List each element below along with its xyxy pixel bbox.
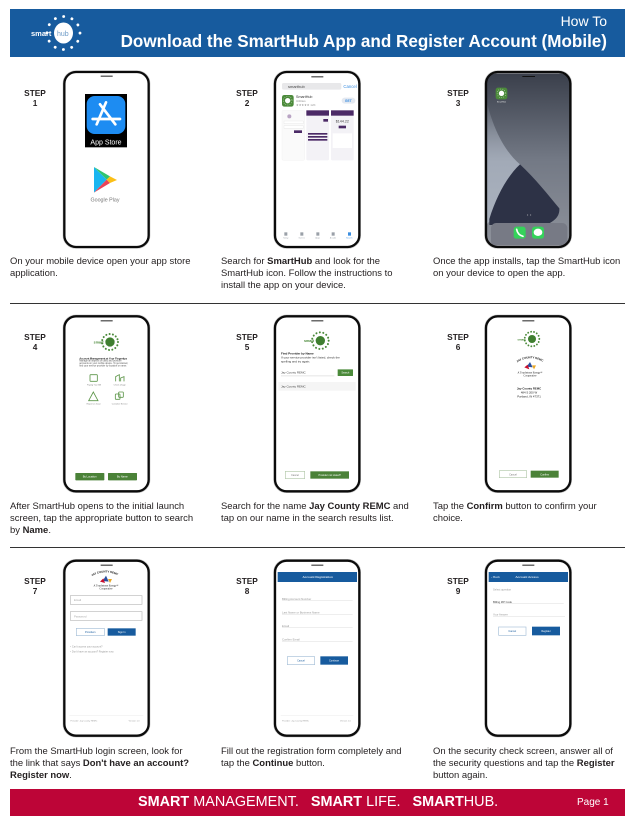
- app screenshots: $144.22: [336, 120, 349, 124]
- phone: confirm provider: [484, 314, 572, 493]
- step 2 text: install the app on your device.: [221, 280, 346, 291]
- step 2 text: Search for SmartHub and look for the: [221, 256, 380, 267]
- search bar: Cancel: [343, 84, 357, 89]
- title: Download the SmartHub App and Register Account (Mobile): [121, 32, 607, 51]
- app listing: ★★★★★ 12K: [296, 103, 316, 107]
- password field: [70, 612, 142, 620]
- logo: [304, 332, 329, 349]
- security fields: Select question: [493, 588, 512, 592]
- button: cancel: [499, 471, 527, 478]
- step 6 label: 6: [456, 342, 460, 352]
- title bar: [278, 572, 357, 582]
- button: cancel: Cancel: [291, 474, 299, 477]
- step 7 label: [24, 576, 46, 596]
- tab bar: Today: [283, 238, 288, 240]
- icon: SmartHub logo: [31, 15, 82, 51]
- password field: Password: [74, 614, 87, 618]
- phone: app stores: [62, 70, 150, 249]
- help links: ▪ Can't access your account?: [70, 645, 103, 648]
- cooperative logo: Cooperative: [100, 588, 113, 591]
- footer band: [10, 789, 625, 816]
- feature icons: [89, 375, 124, 401]
- button: cancel: [287, 657, 315, 665]
- step 1 text: On your mobile device open your app store: [10, 256, 190, 267]
- step 6 text: [433, 501, 597, 524]
- instructions: Find Provider by Name: [281, 352, 314, 356]
- button: by location: By Location: [83, 475, 97, 479]
- step 2 label: STEP: [236, 88, 258, 98]
- button: provider not listed: Provider not Listed?: [319, 474, 341, 477]
- step 4 text: by Name.: [10, 525, 51, 536]
- cooperative logo: [92, 570, 118, 591]
- step 1 text: [10, 256, 190, 279]
- tab bar: Apps: [315, 237, 320, 240]
- form fields: Last Name or Business Name: [282, 611, 320, 615]
- header banner: [10, 9, 625, 57]
- feature captions: [87, 385, 128, 405]
- step 2 label: 2: [245, 98, 249, 108]
- step 6 label: [447, 332, 469, 352]
- button: sign in: Sign In: [118, 631, 126, 634]
- step 2 text: SmartHub icon. Follow the instructions to: [221, 268, 393, 279]
- step 7 label: 7: [33, 586, 37, 596]
- button: confirm: Confirm: [540, 473, 549, 476]
- title bar: Account Access: [515, 575, 539, 579]
- feature captions: Report an Issue: [87, 402, 102, 405]
- step 9 label: STEP: [447, 576, 469, 586]
- cooperative logo: JAY COUNTY REMC: [516, 356, 544, 362]
- tab bar: Search: [346, 238, 353, 240]
- phone: home screen: [484, 70, 572, 249]
- step 8 label: STEP: [236, 576, 258, 586]
- step 8 label: 8: [245, 586, 249, 596]
- button: cancel: Cancel: [297, 660, 305, 663]
- step 6 text: Tap the Confirm button to confirm your: [433, 501, 597, 512]
- security fields: [493, 588, 565, 617]
- help links: [70, 645, 114, 653]
- step 9 label: 9: [456, 586, 460, 596]
- email field: [70, 596, 142, 604]
- button: provider not listed: [310, 471, 349, 479]
- provider footer: Version 1.0: [129, 719, 140, 722]
- wallpaper: [486, 73, 570, 246]
- title bar: [489, 572, 568, 582]
- step 7 text: From the SmartHub login screen, look for: [10, 746, 183, 757]
- step 8 text: Fill out the registration form completely and: [221, 746, 401, 757]
- cooperative logo: A Touchstone Energy®: [94, 584, 118, 587]
- phone: find provider: [273, 314, 361, 493]
- app listing: [282, 95, 355, 107]
- button: cancel: Cancel: [508, 630, 517, 633]
- search field: Jay County REMC: [281, 371, 307, 375]
- provider address: Jay County REMC: [517, 386, 541, 390]
- step 5 label: [236, 332, 258, 352]
- button: by name: [108, 473, 137, 480]
- logo: smart: [517, 337, 526, 341]
- phone: login screen: [62, 559, 150, 738]
- icon: App Store: App Store: [90, 139, 122, 146]
- phone: account registration: [273, 559, 361, 738]
- form fields: [282, 597, 353, 642]
- button: providers: Providers: [85, 631, 96, 634]
- step 3 label: STEP: [447, 88, 469, 98]
- button: cancel: [285, 471, 305, 479]
- intro text: [79, 357, 128, 367]
- form fields: Billing Account Number: [282, 597, 311, 601]
- step 2 text: [221, 256, 393, 291]
- email field: Email: [74, 598, 81, 602]
- search bar: [282, 83, 357, 90]
- feature captions: Customer Service: [112, 402, 128, 405]
- intro text: Manage all aspects of utility and provider: [79, 360, 122, 363]
- step 9 text: [433, 746, 615, 781]
- provider footer: Version 1.0: [340, 720, 352, 723]
- instructions: If your service provider isn't listed, check the: [281, 356, 340, 360]
- app screenshots: [282, 110, 354, 160]
- form fields: Confirm Email: [282, 638, 300, 642]
- title bar: ‹ Back: [491, 575, 500, 579]
- step 5 label: 5: [245, 342, 249, 352]
- instructions: spelling and try again.: [281, 359, 310, 363]
- provider footer: Provider: Jay County REMC: [282, 720, 309, 723]
- step 4 text: [10, 501, 193, 536]
- tab bar: [283, 232, 353, 240]
- step 9 text: button again.: [433, 770, 488, 781]
- button: by name: By Name: [117, 475, 128, 479]
- step 3 label: [447, 88, 469, 108]
- step 6 label: STEP: [447, 332, 469, 342]
- intro text: accounts on your mobile device. To get started,: [79, 362, 128, 365]
- provider footer: [281, 715, 353, 723]
- step 3 text: Once the app installs, tap the SmartHub icon: [433, 256, 620, 267]
- step 4 label: 4: [33, 342, 37, 352]
- step 9 text: On the security check screen, answer all of: [433, 746, 613, 757]
- button: continue: Continue: [329, 660, 340, 663]
- step 5 label: STEP: [236, 332, 258, 342]
- button: register: [532, 627, 560, 635]
- step 5 text: tap on our name in the search results list.: [221, 513, 394, 524]
- provider address: Portland, IN 47371: [517, 394, 541, 398]
- step 7 label: STEP: [24, 576, 46, 586]
- provider footer: Provider: Jay County REMC: [70, 719, 98, 722]
- logo: [94, 334, 118, 350]
- search field: Search: [341, 372, 350, 375]
- step 8 label: [236, 576, 258, 596]
- app listing: SmartHub: [296, 95, 312, 99]
- icon: SmartHub app: [496, 88, 507, 104]
- feature captions: Check Usage: [114, 385, 127, 387]
- button: cancel: [499, 627, 526, 635]
- search result: [278, 382, 356, 391]
- divider: [10, 303, 625, 304]
- provider address: 484 S 200 W: [521, 390, 538, 394]
- logo: smart: [94, 340, 104, 344]
- search bar: smarthub: [288, 84, 305, 89]
- divider: [10, 547, 625, 548]
- feature captions: Paying Your Bill: [87, 385, 102, 387]
- form fields: Email: [282, 624, 289, 628]
- provider footer: [69, 715, 143, 722]
- intro text: Account Management at Your Fingertips: [79, 357, 128, 360]
- step 9 text: the security questions and tap the Register: [433, 758, 615, 769]
- provider address: [517, 386, 541, 398]
- icon: Google Play: Google Play: [90, 197, 120, 203]
- step 7 text: Register now.: [10, 770, 72, 781]
- title bar: Account Registration: [302, 575, 333, 579]
- step 3 label: 3: [456, 98, 460, 108]
- button: continue: [320, 656, 348, 665]
- cooperative logo: A Touchstone Energy®: [518, 371, 542, 374]
- search result: Jay County REMC: [281, 384, 307, 388]
- step 9 label: [447, 576, 469, 596]
- security fields: Your Answer: [493, 613, 508, 617]
- search field: [281, 369, 353, 376]
- cooperative logo: Cooperative: [524, 375, 537, 378]
- instructions: [281, 352, 340, 363]
- step 3 text: [433, 256, 620, 279]
- step 4 label: STEP: [24, 332, 46, 342]
- heading: how to: How To: [561, 13, 607, 29]
- step 4 text: screen, tap the appropriate button to search: [10, 513, 193, 524]
- icon: App Store: [85, 94, 127, 147]
- button: sign in: [108, 628, 136, 636]
- logo: [517, 332, 539, 346]
- step 1 label: STEP: [24, 88, 46, 98]
- step 1 label: [24, 88, 46, 108]
- step 1 label: 1: [33, 98, 37, 108]
- cooperative logo: [516, 356, 544, 378]
- step 7 text: the link that says Don't have an account?: [10, 758, 189, 769]
- step 5 text: Search for the name Jay County REMC and: [221, 501, 409, 512]
- button: cancel: Cancel: [509, 473, 517, 476]
- icon: SmartHub logo: hub: [57, 31, 69, 38]
- security fields: Billing ZIP Code: [493, 600, 513, 604]
- button: confirm: [531, 471, 559, 478]
- step 3 text: on your device to open the app.: [433, 268, 565, 279]
- icon: Google Play: [90, 167, 120, 203]
- step 6 text: choice.: [433, 513, 463, 524]
- step 2 label: [236, 88, 258, 108]
- button: providers: [76, 628, 104, 636]
- phone: security check: [484, 559, 572, 738]
- step 8 text: [221, 746, 401, 769]
- button: register: Register: [541, 630, 551, 633]
- step 4 label: [24, 332, 46, 352]
- logo: smart: [304, 339, 315, 343]
- page number: Page 1: [577, 797, 609, 808]
- step 8 text: tap the Continue button.: [221, 758, 325, 769]
- icon: SmartHub logo: smart: [31, 29, 52, 38]
- step 5 text: [221, 501, 409, 524]
- tagline: SMART MANAGEMENT. SMART LIFE. SMARTHUB.: [138, 794, 498, 810]
- phone: launch screen: [62, 314, 150, 493]
- icon: SmartHub app: SmartHub: [497, 101, 507, 104]
- help links: ▪ Don't have an account? Register now.: [70, 650, 114, 653]
- tab bar: Arcade: [330, 237, 337, 240]
- phone: search SmartHub: [273, 70, 361, 249]
- intro text: find your service provider by location or name.: [79, 364, 127, 367]
- button: by location: [75, 473, 104, 480]
- app listing: Utilities: [296, 99, 306, 103]
- tab bar: Games: [298, 238, 305, 240]
- app listing: GET: [345, 99, 352, 103]
- step 1 text: application.: [10, 268, 58, 279]
- step 4 text: After SmartHub opens to the initial launch: [10, 501, 184, 512]
- step 7 text: [10, 746, 189, 781]
- cooperative logo: JAY COUNTY REMC: [92, 570, 118, 576]
